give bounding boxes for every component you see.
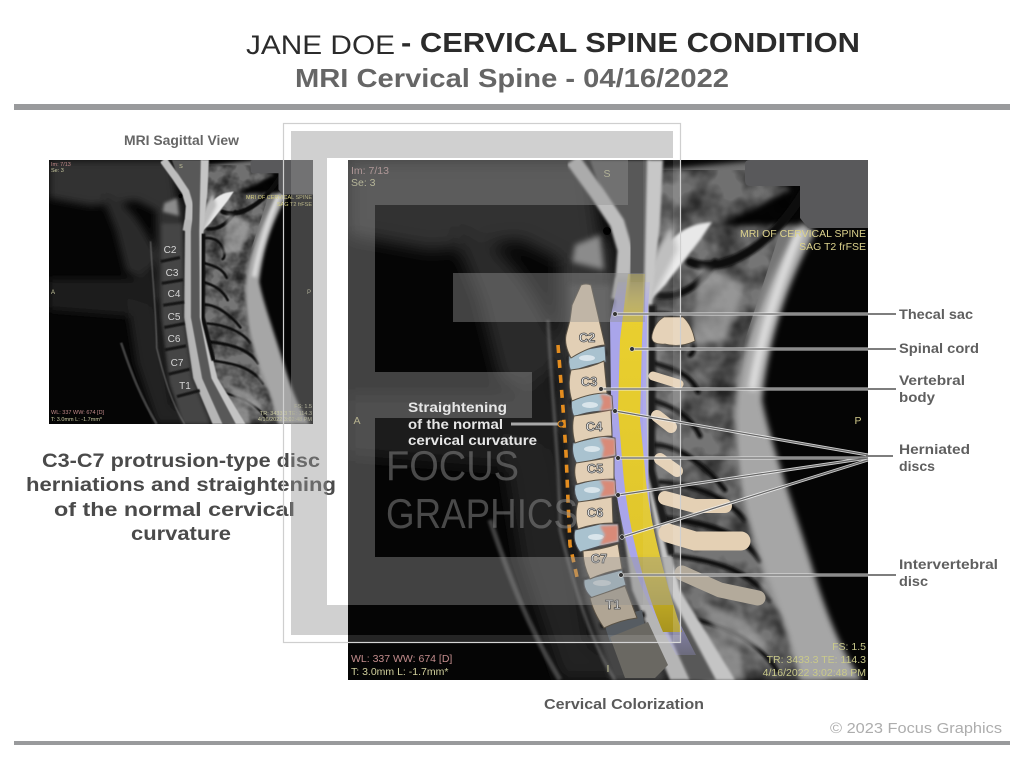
curvature dashed line: [558, 345, 577, 577]
vertebra labels: C2: [579, 330, 595, 345]
scan annotations: P: [854, 415, 862, 427]
scan annotations: Im: 7/13: [51, 162, 71, 168]
vertebra labels: T1: [605, 597, 621, 612]
vertebra labels: C6: [587, 505, 603, 520]
vertebra labels: C3: [166, 268, 179, 279]
text block: diagnosis summary: curvature: [131, 524, 231, 545]
scan annotations: SAG T2 frFSE: [799, 241, 866, 253]
spinal cord: [618, 274, 682, 632]
title: JANE DOE: [246, 30, 395, 60]
scan annotations: S: [603, 168, 611, 180]
scan annotations: TR: 3433.3 TE: 114.3: [767, 654, 866, 666]
labels: anatomy: Spinal cord: [899, 341, 979, 356]
thecal sac: [610, 282, 696, 655]
leader lines: [599, 312, 896, 577]
vertebra labels: C3: [581, 374, 597, 389]
scan annotations: 4/16/2022 3:02:48 PM: [763, 667, 866, 679]
vertebra labels: C5: [587, 461, 603, 476]
panel: small MRI sagittal view: [49, 160, 313, 424]
vertebra labels: C5: [168, 312, 181, 323]
labels: anatomy: disc: [899, 574, 929, 589]
text block: diagnosis summary: C3-C7 protrusion-type disc: [42, 451, 320, 472]
text block: diagnosis summary: [26, 451, 336, 545]
heading: MRI sagittal view: MRI Sagittal View: [124, 133, 240, 148]
watermark text: [386, 442, 578, 537]
callout: straightening of curvature: of the normal: [408, 417, 503, 432]
text block: diagnosis summary: herniations and straightening: [26, 475, 336, 496]
disc highlights: [579, 355, 611, 586]
scan annotations: Se: 3: [51, 168, 64, 174]
caption: cervical colorization: Cervical Colorization: [544, 697, 704, 713]
vertebra labels: [164, 245, 191, 392]
vertebra labels: C7: [591, 551, 607, 566]
scan annotations: FS: 1.5: [832, 641, 866, 653]
labels: anatomy: [899, 307, 998, 589]
scan annotations: WL: 337 WW: 674 [D]: [351, 653, 452, 665]
scan annotations: Se: 3: [351, 177, 376, 189]
copyright: © 2023 Focus Graphics: [830, 720, 1002, 737]
scan annotations: A: [353, 415, 361, 427]
herniated disc tips: [600, 394, 618, 545]
vertebra labels: C4: [168, 289, 181, 300]
labels: anatomy: Intervertebral: [899, 557, 998, 572]
vertebrae: [566, 284, 637, 628]
scan annotations: T: 3.0mm L: -1.7mm*: [51, 417, 103, 423]
watermark text: FOCUS: [386, 442, 519, 489]
scan annotations: I: [607, 663, 609, 675]
vertebra labels: C7: [171, 358, 184, 369]
scan annotations: FS: 1.5: [294, 404, 312, 410]
scan annotations: MRI OF CERVICAL SPINE: [246, 195, 312, 201]
scan annotations: 4/16/2022 3:02:48 PM: [258, 417, 312, 423]
labels: anatomy: Herniated: [899, 442, 970, 457]
subtitle: MRI Cervical Spine - 04/16/2022: [295, 63, 729, 93]
vertebra labels: C6: [168, 334, 181, 345]
labels: anatomy: body: [899, 390, 936, 405]
scan annotations: A: [51, 290, 55, 296]
scan annotations: TR: 3433.3 TE: 114.3: [260, 411, 312, 417]
callout: straightening of curvature: [408, 400, 564, 448]
spinous processes: [652, 317, 695, 345]
discs: [569, 346, 626, 598]
vertebra labels: C2: [164, 245, 177, 256]
scan annotations: SAG T2 frFSE: [277, 202, 312, 208]
scan annotations: S: [179, 164, 183, 170]
scan annotations: Im: 7/13: [351, 165, 389, 177]
scan annotations: P: [307, 290, 311, 296]
scan annotations: MRI OF CERVICAL SPINE: [740, 228, 866, 240]
text block: diagnosis summary: of the normal cervical: [54, 500, 295, 521]
callout: straightening of curvature: Straightening: [408, 400, 507, 415]
panel: colorized MRI: [348, 160, 868, 680]
labels: anatomy: discs: [899, 459, 935, 474]
watermark text: GRAPHICS: [386, 490, 578, 537]
scan annotations: [351, 165, 866, 679]
scan annotations: [51, 162, 312, 423]
scan annotations: WL: 337 WW: 674 [D]: [51, 410, 105, 416]
vertebra labels: T1: [179, 381, 191, 392]
labels: anatomy: Vertebral: [899, 373, 965, 388]
scan annotations: T: 3.0mm L: -1.7mm*: [351, 666, 448, 678]
labels: anatomy: Thecal sac: [899, 307, 974, 322]
callout: straightening of curvature: cervical curvature: [408, 433, 538, 448]
vertebra labels: [579, 330, 621, 612]
watermark logo frame: [284, 124, 680, 643]
title: [246, 27, 860, 60]
title: - CERVICAL SPINE CONDITION: [401, 27, 860, 58]
vertebra labels: C4: [586, 419, 603, 434]
